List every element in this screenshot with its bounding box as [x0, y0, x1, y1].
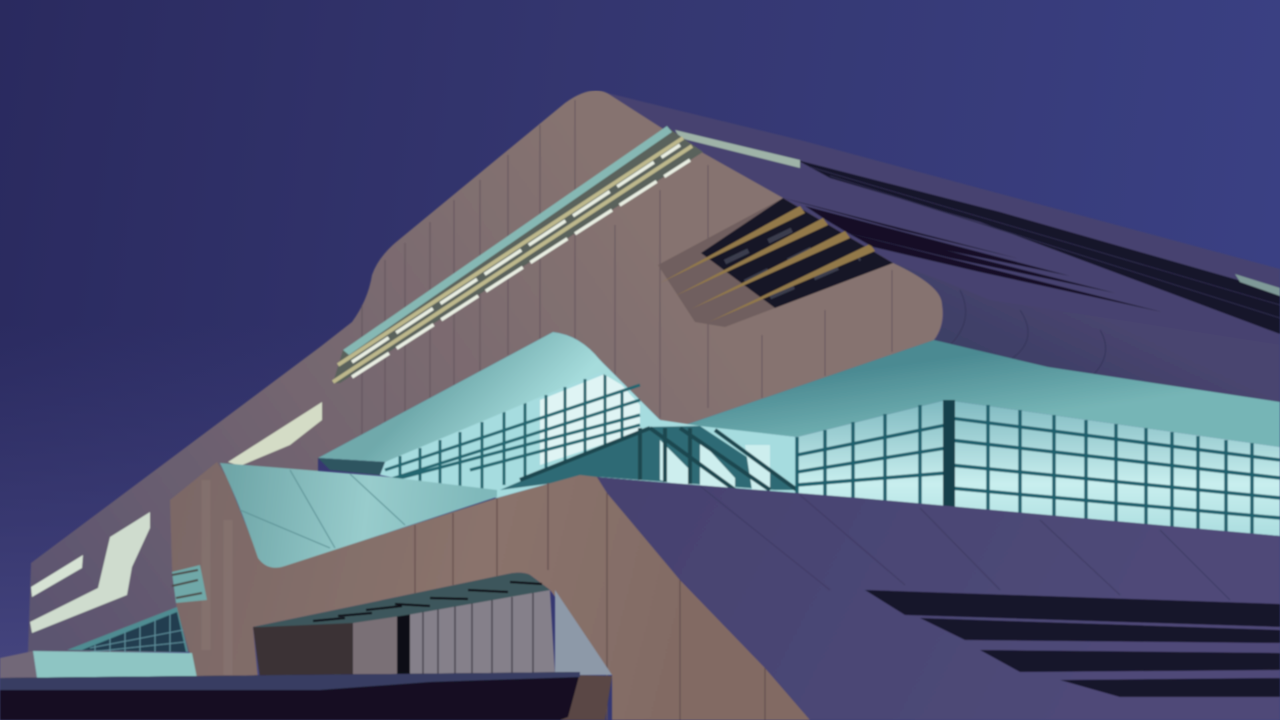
canopy joints [950, 290, 1106, 378]
entrance lit wall [410, 590, 555, 675]
lattice lit panes [660, 440, 770, 490]
glass mullions [797, 405, 1280, 534]
upper concrete facade [28, 91, 943, 652]
slot highlight stripes [810, 167, 1280, 318]
soffit slots [313, 582, 542, 621]
rounded canopy band [893, 263, 1280, 403]
left pale wing [33, 651, 197, 678]
far-left skylight long [30, 512, 150, 633]
small teal detail [172, 565, 207, 603]
right glass [946, 400, 1280, 536]
right-centre glass [797, 400, 946, 508]
ledge top strip [0, 672, 580, 690]
left glazing grid [82, 612, 186, 652]
upper skylight [333, 126, 703, 383]
low mauve wall stub [0, 651, 37, 678]
central mullions [385, 372, 640, 490]
entrance wall joints [423, 593, 533, 675]
louvre dark opening [701, 198, 893, 308]
weathered streaks [206, 480, 228, 675]
wing joints [240, 470, 405, 548]
glass wing roof [220, 463, 497, 568]
central bright pane [540, 372, 640, 465]
lower roof joints [700, 486, 1230, 600]
central soffit [318, 332, 622, 462]
louvre blades [660, 206, 875, 322]
louvre lip [658, 198, 893, 327]
entrance soffit [253, 573, 550, 627]
entrance right pale wall [555, 590, 612, 675]
dark lattice band [500, 426, 797, 490]
right soffit [685, 340, 1280, 447]
entrance mid wall [353, 612, 397, 676]
dark nub below soffit [318, 458, 385, 475]
skylight olive beams [333, 138, 692, 382]
lower right roof [597, 477, 1280, 720]
lower dark louvres [865, 590, 1280, 697]
roof dark slits [783, 198, 1162, 312]
foreground brown return [560, 675, 612, 720]
far-left skylight short [31, 555, 83, 597]
foreground dark ledge [0, 672, 580, 720]
roof light bar [675, 130, 800, 168]
skylight base [333, 127, 703, 383]
left low glazing [67, 607, 188, 652]
lower concrete joints [415, 483, 765, 720]
central glass facade [380, 360, 797, 498]
main corner column [943, 400, 955, 508]
panel joints [362, 100, 892, 438]
lower entrance back wall [253, 610, 397, 678]
lower concrete facade [170, 462, 810, 720]
skylight teal band [343, 126, 672, 355]
roof upper dark slot [797, 160, 1280, 334]
roof plane [590, 92, 1280, 425]
roof slot glint [1235, 274, 1280, 296]
skylight lit glazing [352, 145, 690, 377]
entrance dark door [397, 612, 411, 676]
louvre inner glints [725, 226, 860, 297]
mid skylight [228, 402, 322, 466]
lattice diagonals [520, 428, 797, 490]
